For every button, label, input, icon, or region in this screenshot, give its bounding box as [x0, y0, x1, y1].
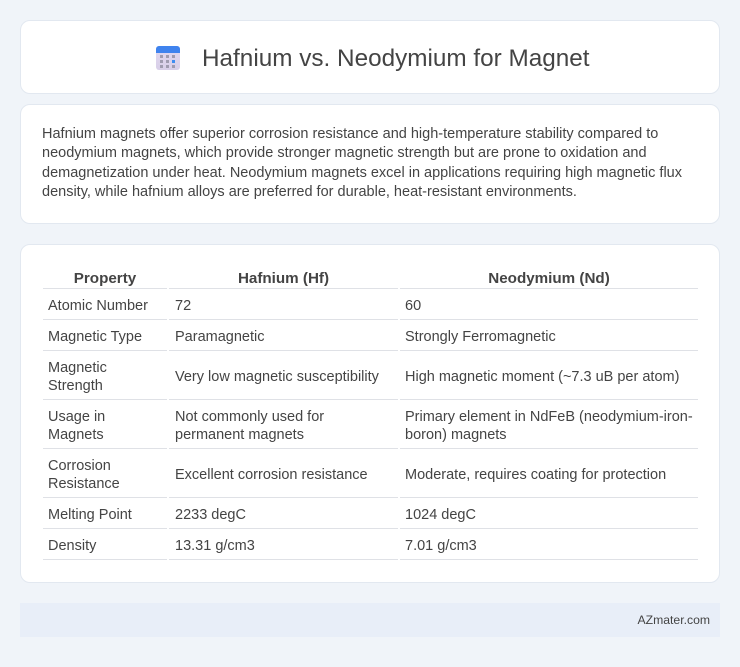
- row: magnetic type: Magnetic Type: [48, 329, 142, 345]
- row: corrosion resistance: Corrosion: [48, 458, 111, 474]
- row: melting point: Melting Point: [48, 507, 132, 523]
- row: melting point: 1024 degC: [405, 507, 476, 523]
- summary text: [42, 126, 682, 200]
- row: usage in magnets: Usage in: [48, 409, 105, 425]
- row: magnetic strength: Magnetic: [48, 360, 107, 376]
- summary text: density, while hafnium alloys are preferred for durable, heat-resistant environments.: [42, 184, 577, 200]
- row: corrosion resistance: Resistance: [48, 476, 120, 492]
- column headers: [74, 270, 610, 287]
- row: density: 7.01 g/cm3: [405, 538, 477, 554]
- summary text: demagnetization under heat. Neodymium magnets excel in applications requiring high magnetic flux: [42, 165, 682, 181]
- row: usage in magnets: boron) magnets: [405, 427, 507, 443]
- row: magnetic strength: Very low magnetic susceptibility: [175, 369, 379, 385]
- footer credit: AZmater.com: [638, 613, 710, 627]
- icon: calendar: [156, 46, 180, 70]
- row: corrosion resistance: Excellent corrosion resistance: [175, 467, 368, 483]
- comparison table: [43, 270, 698, 560]
- row: density: [48, 538, 477, 554]
- table card: [20, 244, 720, 583]
- row: magnetic type: Paramagnetic: [175, 329, 264, 345]
- row: usage in magnets: Primary element in NdFeB (neodymium-iron-: [405, 409, 693, 425]
- row: magnetic strength: High magnetic moment (~7.3 uB per atom): [405, 369, 679, 385]
- row: atomic number: 60: [405, 298, 421, 314]
- header card: [20, 20, 720, 94]
- row: density: 13.31 g/cm3: [175, 538, 255, 554]
- row: magnetic strength: Strength: [48, 378, 103, 394]
- column headers: Property: [74, 270, 136, 287]
- row: melting point: [48, 507, 476, 523]
- summary text: Hafnium magnets offer superior corrosion resistance and high-temperature stability compared to: [42, 126, 658, 142]
- summary card: [20, 104, 720, 224]
- row: atomic number: 72: [175, 298, 191, 314]
- title: Hafnium vs. Neodymium for Magnet: [202, 45, 590, 72]
- row: usage in magnets: Not commonly used for: [175, 409, 324, 425]
- footer bar: [20, 603, 720, 637]
- row: usage in magnets: [48, 409, 693, 443]
- row: atomic number: Atomic Number: [48, 298, 148, 314]
- row: atomic number: [48, 298, 421, 314]
- row: magnetic type: [48, 329, 556, 345]
- row: magnetic strength: [48, 360, 679, 394]
- summary text: neodymium magnets, which provide stronger magnetic strength but are prone to oxidation and: [42, 145, 647, 161]
- row: magnetic type: Strongly Ferromagnetic: [405, 329, 556, 345]
- row: density: Density: [48, 538, 96, 554]
- row: usage in magnets: Magnets: [48, 427, 104, 443]
- row: corrosion resistance: [48, 458, 666, 492]
- row: corrosion resistance: Moderate, requires coating for protection: [405, 467, 666, 483]
- row: usage in magnets: permanent magnets: [175, 427, 304, 443]
- column headers: Neodymium (Nd): [488, 270, 610, 287]
- row: melting point: 2233 degC: [175, 507, 246, 523]
- column headers: Hafnium (Hf): [238, 270, 329, 287]
